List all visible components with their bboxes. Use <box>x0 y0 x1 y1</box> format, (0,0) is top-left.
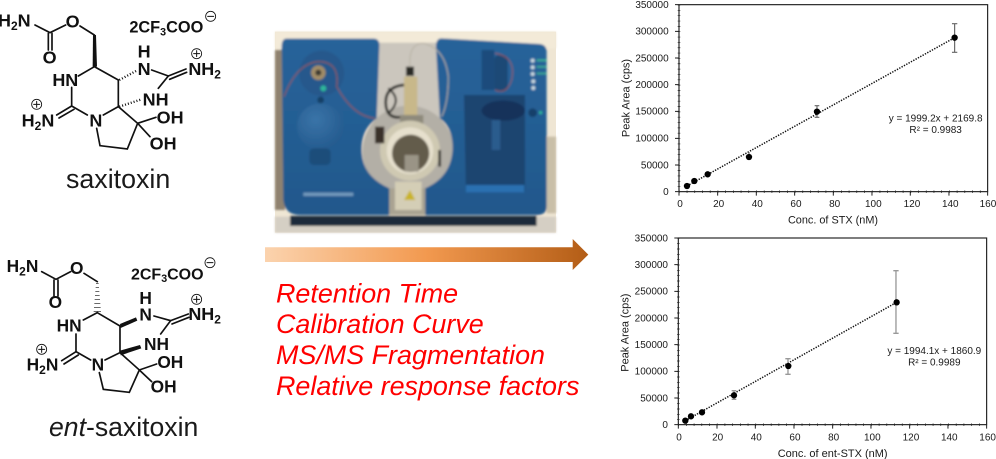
molecule: saxitoxin: O <box>43 47 57 67</box>
chart: STX calibration curve: 250000 <box>635 53 669 64</box>
chart: STX calibration curve: 50000 <box>641 160 669 171</box>
chart: STX calibration curve: 140 <box>942 199 959 210</box>
molecule: ent-saxitoxin: H <box>139 288 152 308</box>
molecule: ent-saxitoxin: O <box>49 292 62 312</box>
molecule: saxitoxin: HN <box>52 70 78 90</box>
molecule: ent-saxitoxin: H <box>27 355 39 375</box>
photo: mass spectrometer <box>275 32 556 233</box>
chart: STX calibration curve: 0 <box>677 199 683 210</box>
molecule: saxitoxin: COO <box>166 19 204 37</box>
molecule: ent-saxitoxin: OH <box>151 377 177 397</box>
chart: ent-STX calibration curve: 0 <box>676 432 682 443</box>
molecule: saxitoxin: NH <box>188 59 214 79</box>
molecule: saxitoxin: 2 <box>35 119 42 133</box>
chart: STX calibration curve: 0 <box>663 187 669 198</box>
molecule: ent-saxitoxin <box>7 256 221 397</box>
molecule: saxitoxin: N <box>41 111 54 131</box>
molecule: ent-saxitoxin: NH <box>188 304 214 324</box>
chart: ent-STX calibration curve: 300000 <box>635 260 668 271</box>
chart: ent-STX calibration curve: 150000 <box>635 340 668 351</box>
molecule: ent-saxitoxin: H <box>7 256 19 276</box>
text block: analysis list: Retention Time <box>276 278 458 308</box>
molecule: ent-saxitoxin: 2 <box>39 363 46 377</box>
chart: ent-STX calibration curve: 0 <box>662 420 668 431</box>
chart: STX calibration curve: R² = 0.9983 <box>909 125 962 136</box>
chart: STX calibration curve: 60 <box>790 199 802 210</box>
chart: STX calibration curve: 120 <box>904 199 921 210</box>
molecule: saxitoxin: N <box>89 110 102 130</box>
molecule: saxitoxin <box>0 11 221 153</box>
molecule: ent-saxitoxin: N <box>139 305 152 325</box>
chart: ent-STX calibration curve: 120 <box>903 432 920 443</box>
chart: ent-STX calibration curve: 200000 <box>635 313 668 324</box>
chart: STX calibration curve: 150000 <box>635 107 669 118</box>
chart: STX calibration curve: 350000 <box>635 0 669 11</box>
chart: ent-STX calibration curve: 60 <box>789 432 801 443</box>
chart: STX calibration curve: 80 <box>829 199 841 210</box>
chart: ent-STX calibration curve: Peak Area (cps) <box>620 294 632 372</box>
molecule: saxitoxin: OH <box>157 108 184 128</box>
molecule: saxitoxin: 2CF <box>129 19 160 37</box>
chart: ent-STX calibration curve: 80 <box>828 432 840 443</box>
molecule: saxitoxin: H <box>138 41 151 61</box>
molecule: saxitoxin: N <box>18 11 31 31</box>
molecule: ent-saxitoxin: OH <box>157 352 183 372</box>
text block: analysis list: MS/MS Fragmentation <box>276 340 545 370</box>
chart: ent-STX calibration curve: 100 <box>864 432 881 443</box>
molecule: ent-saxitoxin: N <box>26 256 38 276</box>
molecule: saxitoxin: NH <box>143 89 169 109</box>
text block: analysis list <box>276 278 579 401</box>
chart: STX calibration curve: y = 1999.2x + 2169.8 <box>889 113 983 124</box>
chart: ent-STX calibration curve: 50000 <box>640 393 668 404</box>
molecule: ent-saxitoxin: NH <box>144 334 169 354</box>
text block: analysis list: Calibration Curve <box>276 309 484 339</box>
molecule: ent-saxitoxin: 2 <box>19 264 26 278</box>
molecule: saxitoxin: N <box>138 59 151 79</box>
arrow <box>265 239 588 270</box>
chart: STX calibration curve <box>621 0 996 226</box>
chart: STX calibration curve: 300000 <box>635 27 669 38</box>
molecule: saxitoxin: 2 <box>11 19 18 33</box>
molecule: ent-saxitoxin: 2CF <box>131 266 161 283</box>
molecule: saxitoxin: OH <box>150 133 177 153</box>
text block: analysis list: Relative response factors <box>276 371 579 401</box>
chart: ent-STX calibration curve: y = 1994.1x + 1860.9 <box>887 346 982 357</box>
chart: ent-STX calibration curve: 40 <box>751 432 762 443</box>
chart: ent-STX calibration curve: 160 <box>979 432 996 443</box>
label: ent-saxitoxin: ent-saxitoxin <box>49 412 198 442</box>
chart: STX calibration curve: Peak Area (cps) <box>621 59 633 137</box>
label: saxitoxin: saxitoxin <box>66 164 170 194</box>
chart: ent-STX calibration curve: 20 <box>712 432 724 443</box>
molecule: ent-saxitoxin: HN <box>57 315 82 335</box>
chart: STX calibration curve: 160 <box>980 199 996 210</box>
chart: ent-STX calibration curve: R² = 0.9989 <box>908 357 961 368</box>
chart: STX calibration curve: 40 <box>752 199 763 210</box>
molecule: ent-saxitoxin: 2 <box>214 312 221 326</box>
molecule: ent-saxitoxin: COO <box>167 266 204 283</box>
chart: ent-STX calibration curve: 140 <box>941 432 958 443</box>
molecule: ent-saxitoxin: N <box>46 355 58 375</box>
chart: STX calibration curve: 20 <box>713 199 725 210</box>
molecule: ent-saxitoxin: 3 <box>161 273 167 285</box>
molecule: ent-saxitoxin: N <box>92 355 104 375</box>
chart: STX calibration curve: 200000 <box>635 80 669 91</box>
molecule: saxitoxin: 2 <box>214 67 221 81</box>
molecule: ent-saxitoxin: O <box>70 258 83 278</box>
molecule: saxitoxin: 3 <box>160 26 166 38</box>
chart: ent-STX calibration curve: 250000 <box>635 287 668 298</box>
chart: ent-STX calibration curve: 350000 <box>635 233 668 244</box>
chart: STX calibration curve: 100 <box>865 199 882 210</box>
chart: STX calibration curve: Conc. of STX (nM) <box>788 214 878 226</box>
chart: ent-STX calibration curve <box>620 233 996 459</box>
chart: STX calibration curve: 100000 <box>635 134 669 145</box>
molecule: saxitoxin: H <box>22 111 35 131</box>
chart: ent-STX calibration curve: 100000 <box>635 367 668 378</box>
molecule: saxitoxin: O <box>66 11 80 31</box>
